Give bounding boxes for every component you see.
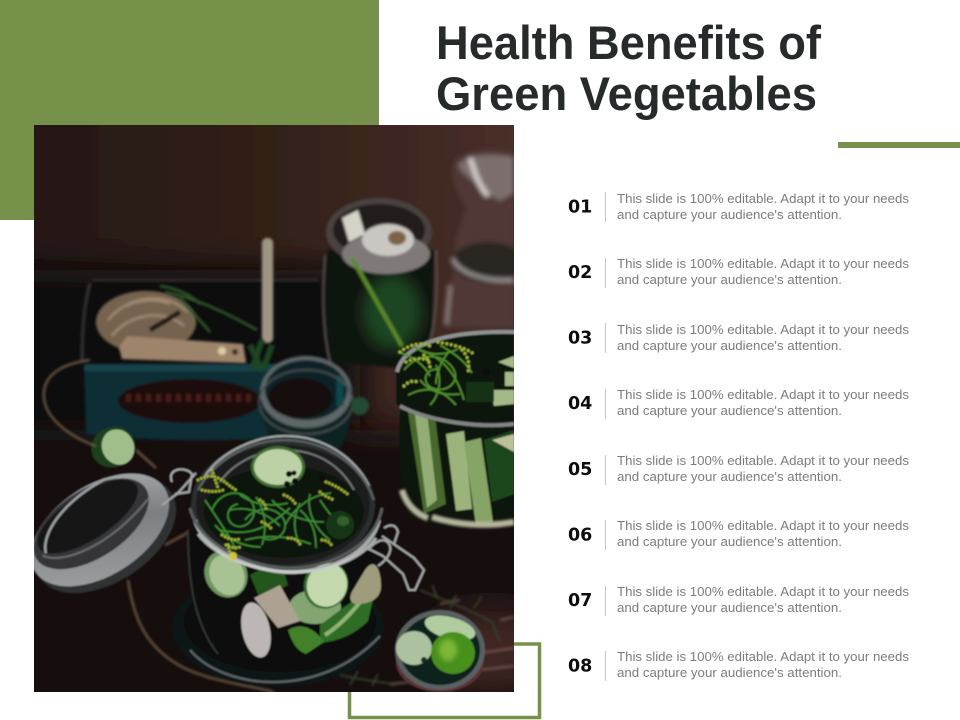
right jar with cucumber sticks [396,330,517,527]
item 07: and capture your audience's attention. [617,600,842,615]
item 02: This slide is 100% editable. Adapt it to your needs [617,256,909,271]
item 07: This slide is 100% editable. Adapt it to your needs [617,584,909,599]
twine ball [96,291,196,353]
title [436,16,821,120]
twine strands [44,360,274,692]
item 03: and capture your audience's attention. [617,338,842,353]
main jar rim and dill [190,436,382,572]
wooden handle [119,336,246,363]
item 04: and capture your audience's attention. [617,403,842,418]
item 05: 05 [568,460,592,480]
accent bar [838,142,960,148]
item 03: This slide is 100% editable. Adapt it to your needs [617,322,909,337]
item 07 [568,584,909,616]
item 08: This slide is 100% editable. Adapt it to your needs [617,649,909,664]
list of eight benefits [568,191,909,681]
item 08: and capture your audience's attention. [617,665,842,680]
item 05: This slide is 100% editable. Adapt it to your needs [617,453,909,468]
item 01 [568,191,909,222]
item 02: and capture your audience's attention. [617,272,842,287]
item 05 [568,453,909,485]
item 04: 04 [568,394,592,414]
peppercorns [284,470,325,487]
item 02 [568,256,909,288]
dill on right jar [398,345,472,405]
item 08 [568,649,909,681]
item 02: 02 [568,263,592,283]
cut cucumber on table [90,426,136,468]
jar cucumber slices [203,552,382,659]
dill flowers [198,470,350,558]
item 01: This slide is 100% editable. Adapt it to your needs [617,191,909,206]
item 08: 08 [568,656,592,676]
open glass lid [34,472,177,594]
item 05: and capture your audience's attention. [617,469,842,484]
item 06 [568,518,909,550]
outlined accent frame [350,644,540,718]
title: Health Benefits of [436,16,821,69]
dill sprigs in tin [160,286,272,370]
wooden stick [262,238,273,343]
item 06: This slide is 100% editable. Adapt it to your needs [617,518,909,533]
item 03 [568,322,909,353]
green corner block [0,0,379,220]
photo: pickled cucumbers in jars [34,125,514,692]
dill on table [340,585,500,686]
item 04 [568,387,909,419]
title: Green Vegetables [436,67,817,120]
tin box [82,279,324,440]
photo background wall and table [34,125,514,692]
top cucumber slice [251,446,305,488]
item 07: 07 [568,591,592,611]
carafe [446,150,524,328]
item 01: 01 [568,198,592,218]
item 06: 06 [568,526,592,546]
small lid with cucumbers [395,610,485,692]
item 01: and capture your audience's attention. [617,207,842,222]
small empty jar [259,356,369,455]
item 03: 03 [568,328,592,348]
wire clasp [162,469,424,590]
dill tendrils [205,493,350,550]
main jar body [187,526,381,664]
item 06: and capture your audience's attention. [617,534,842,549]
back jar with garlic [323,198,437,368]
plate under main jar [172,594,384,688]
item 04: This slide is 100% editable. Adapt it to your needs [617,387,909,402]
